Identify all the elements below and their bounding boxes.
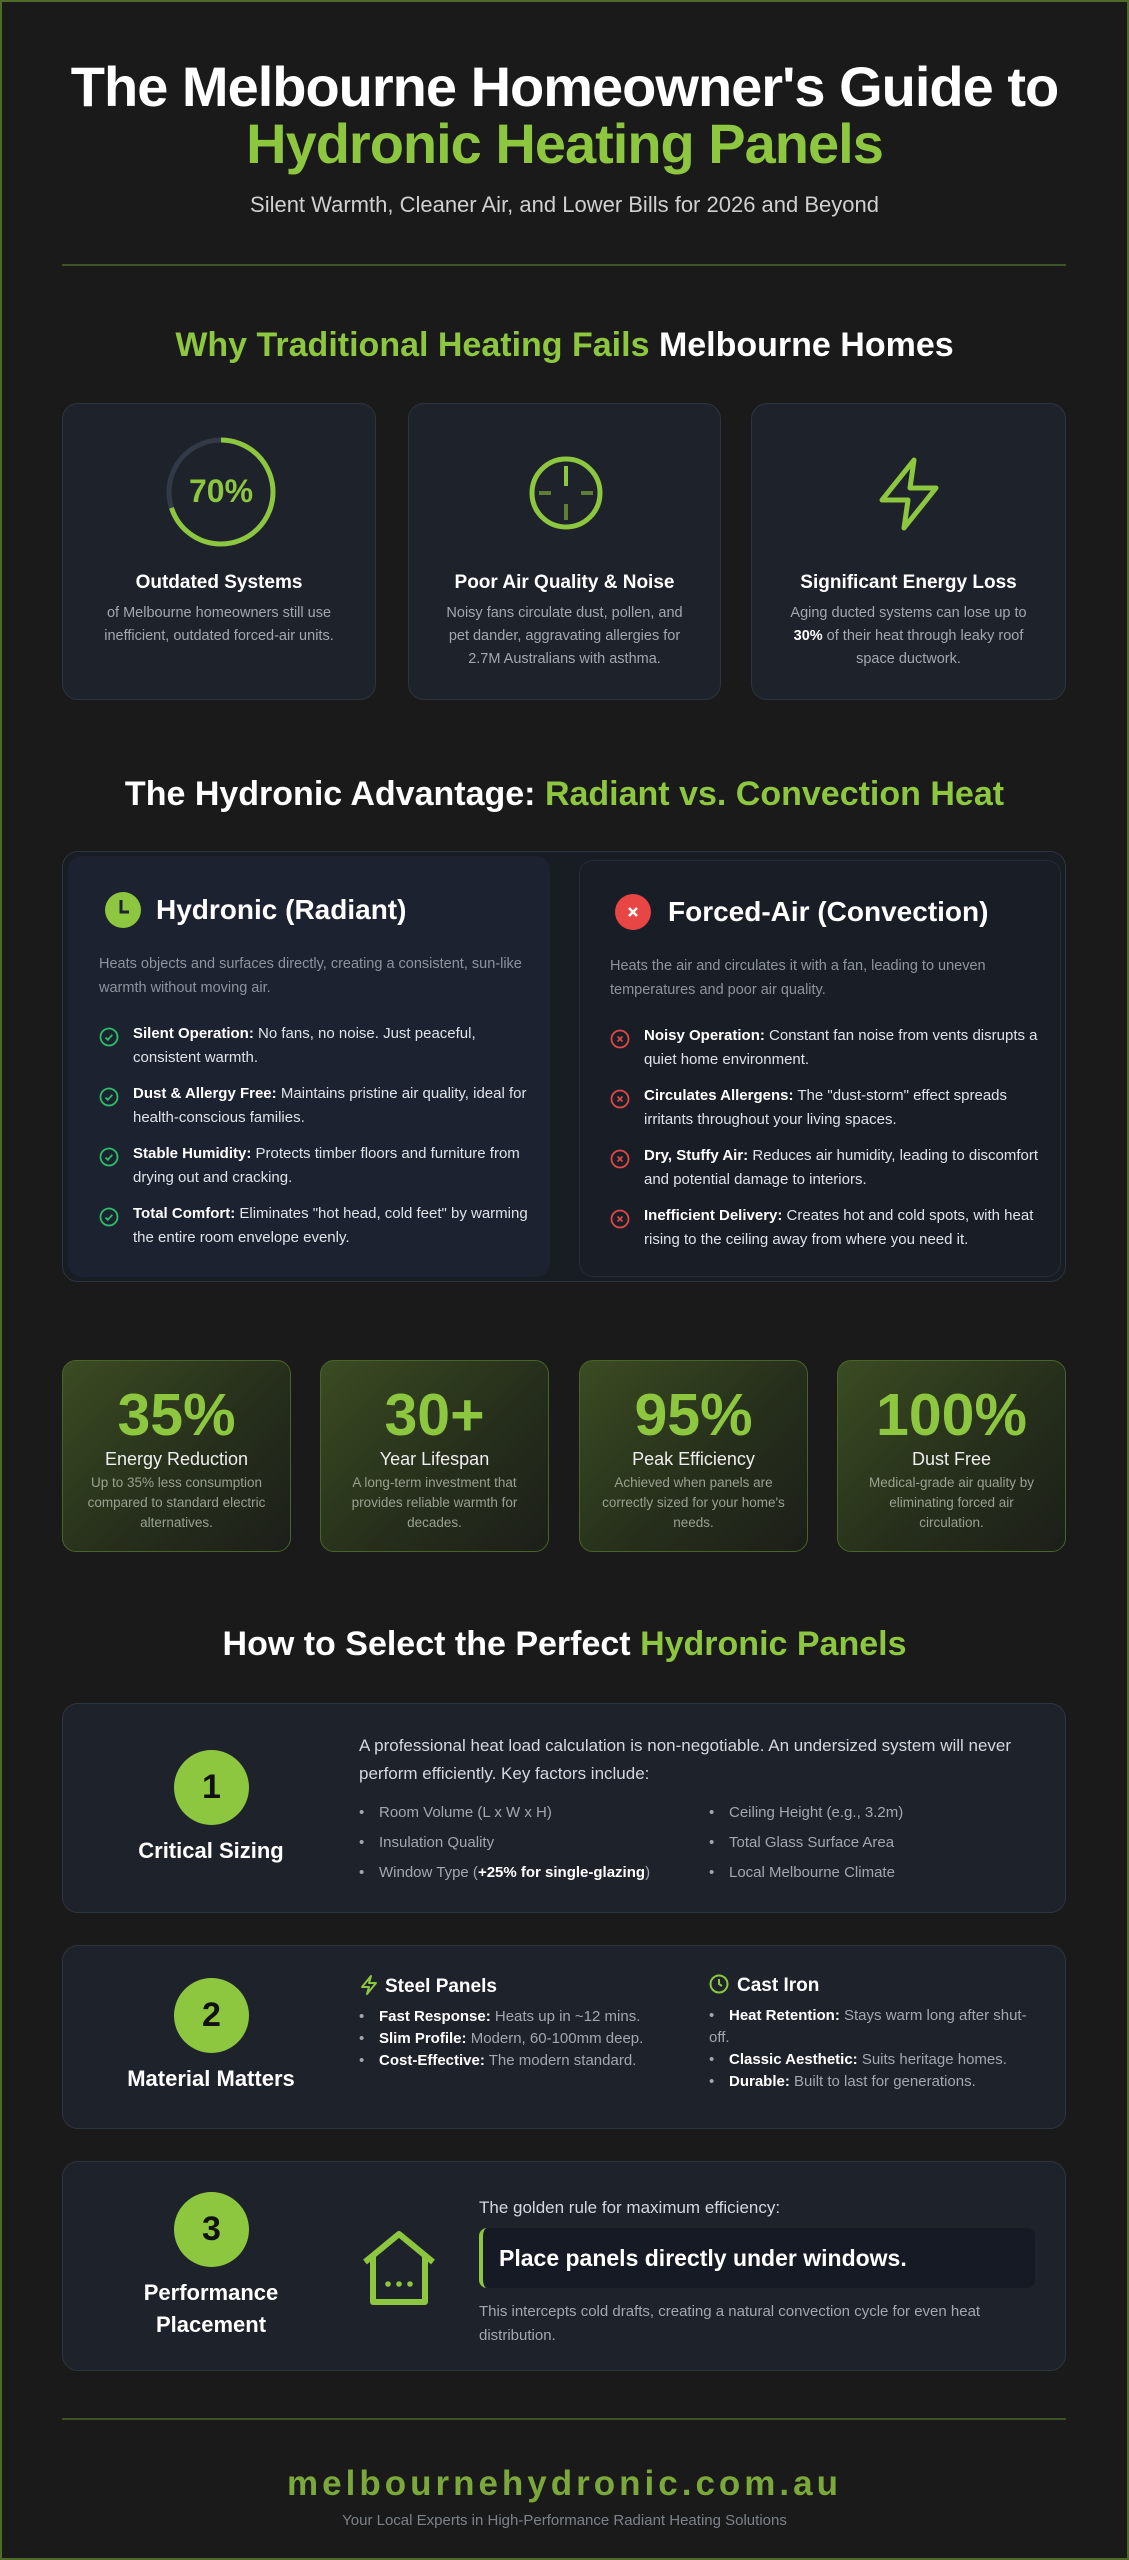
- stat: 30+: [320, 1360, 549, 1552]
- column: steel panels: •: [359, 2052, 364, 2069]
- step 1: critical sizing: [62, 1703, 1066, 1913]
- step label: Critical Sizing: [138, 1838, 284, 1863]
- number badge: 3: [202, 2210, 221, 2248]
- list: factors left: Insulation Quality: [379, 1834, 494, 1851]
- icon: 70% ring: 70%: [189, 473, 253, 509]
- card text: Noisy fans circulate dust, pollen, and pet dander, aggravating allergies for 2.7M Australians with asthma.: [446, 605, 683, 667]
- stat: 100%: [837, 1360, 1066, 1552]
- list: factors left: Room Volume (L x W x H): [379, 1804, 552, 1821]
- heading: Forced-Air (Convection): [668, 896, 988, 927]
- text: explanation: This intercepts cold drafts, creating a natural convection cycle for even heat distribution.: [479, 2303, 980, 2344]
- step 3: performance placement: [62, 2161, 1066, 2371]
- column: cast iron: •: [709, 2051, 714, 2068]
- column: cast iron: •: [709, 2073, 714, 2090]
- item: Stable Humidity: Protects timber floors and furniture from drying out and cracking.: [133, 1145, 520, 1186]
- stat: 35%: [62, 1360, 291, 1552]
- item: Inefficient Delivery: Creates hot and cold spots, with heat rising to the ceiling away from where you need it.: [644, 1207, 1033, 1248]
- stat: 100%: Medical-grade air quality by eliminating forced air circulation.: [869, 1475, 1034, 1530]
- panel: energy loss: [751, 403, 1066, 700]
- stat: 35%: Energy Reduction: [105, 1449, 248, 1469]
- panel: poor air quality: [408, 403, 721, 700]
- card title: Outdated Systems: [136, 572, 302, 593]
- column: cast iron: Classic Aesthetic: Suits heritage homes.: [729, 2051, 1007, 2068]
- column: steel panels: Fast Response: Heats up in ~12 mins.: [379, 2008, 640, 2025]
- intro text: A professional heat load calculation is non-negotiable. An undersized system will never perform efficiently. Key factors include:: [359, 1736, 1011, 1783]
- item: Dust & Allergy Free: Maintains pristine air quality, ideal for health-conscious families.: [133, 1085, 526, 1126]
- column: steel panels: [359, 1975, 643, 2069]
- number badge: [174, 2192, 249, 2267]
- panel: forced air: [579, 860, 1061, 1277]
- list: factors left: •: [359, 1834, 364, 1851]
- card title: Poor Air Quality & Noise: [455, 572, 674, 593]
- stat: 30+: 30+: [384, 1382, 485, 1448]
- column: steel panels: •: [359, 2030, 364, 2047]
- stat: 95%: [579, 1360, 808, 1552]
- step label: Material Matters: [127, 2066, 295, 2091]
- number badge: 1: [202, 1768, 221, 1806]
- stat: 95%: Peak Efficiency: [632, 1449, 755, 1469]
- item: Circulates Allergens: The "dust-storm" effect spreads irritants throughout your living spaces.: [644, 1087, 1007, 1128]
- column: steel panels: •: [359, 2008, 364, 2025]
- stat: 30+: Year Lifespan: [380, 1449, 489, 1469]
- column: cast iron: Cast Iron: [737, 1975, 819, 1996]
- step label: [144, 2280, 278, 2337]
- list: factors left: [359, 1804, 650, 1881]
- stat: 95%: Achieved when panels are correctly sized for your home's needs.: [602, 1475, 785, 1530]
- stat: 35%: Up to 35% less consumption compared to standard electric alternatives.: [88, 1475, 265, 1530]
- list: factors right: [709, 1804, 903, 1881]
- column: steel panels: Cost-Effective: The modern standard.: [379, 2052, 636, 2069]
- footer url: melbournehydronic.com.au: [287, 2464, 842, 2503]
- number badge: [174, 1750, 249, 1825]
- text: golden rule: The golden rule for maximum efficiency:: [479, 2198, 780, 2217]
- card title: Significant Energy Loss: [800, 572, 1017, 593]
- icon: green clock: [105, 892, 141, 928]
- description: Heats the air and circulates it with a fan, leading to uneven temperatures and poor air quality.: [610, 958, 986, 998]
- card text: of Melbourne homeowners still use inefficient, outdated forced-air units.: [104, 605, 334, 644]
- callout: [479, 2228, 1035, 2288]
- heading: hydronic advantage: The Hydronic Advantage: Radiant vs. Convection Heat: [125, 775, 1004, 813]
- title: The Melbourne Homeowner's Guide to: [71, 55, 1058, 118]
- icon: fan/crosshair: [530, 456, 602, 530]
- panel: outdated systems: [62, 403, 376, 700]
- column: cast iron: •: [709, 2007, 714, 2024]
- list: factors left: Window Type (+25% for single-glazing): [379, 1864, 650, 1881]
- step label: Placement: [156, 2312, 266, 2337]
- list: factors right: •: [709, 1864, 714, 1881]
- title: [71, 55, 1058, 175]
- list: factors left: •: [359, 1864, 364, 1881]
- stat: 95%: 95%: [634, 1382, 753, 1448]
- description: Heats objects and surfaces directly, creating a consistent, sun-like warmth without moving air.: [99, 956, 522, 996]
- list: factors right: Ceiling Height (e.g., 3.2m): [729, 1804, 903, 1821]
- panel: comparison: [62, 851, 1066, 1282]
- list: factors right: •: [709, 1834, 714, 1851]
- number badge: [174, 1978, 249, 2053]
- stat: 35%: 35%: [117, 1382, 236, 1448]
- item: Silent Operation: No fans, no noise. Just peaceful, consistent warmth.: [133, 1025, 476, 1066]
- card text: Aging ducted systems can lose up to 30% of their heat through leaky roof space ductwork.: [790, 605, 1027, 667]
- callout: Place panels directly under windows.: [499, 2245, 907, 2271]
- list: factors right: •: [709, 1804, 714, 1821]
- subtitle: Silent Warmth, Cleaner Air, and Lower Bills for 2026 and Beyond: [250, 192, 879, 217]
- heading: Hydronic (Radiant): [156, 894, 406, 925]
- list: benefits: [100, 1025, 528, 1246]
- stat: 100%: Dust Free: [912, 1449, 991, 1469]
- column: steel panels: Steel Panels: [385, 1976, 497, 1997]
- panel: hydronic radiant: [68, 856, 550, 1277]
- stat: 30+: A long-term investment that provides reliable warmth for decades.: [352, 1475, 517, 1530]
- icon: red x: [615, 894, 651, 930]
- item: Dry, Stuffy Air: Reduces air humidity, leading to discomfort and potential damage to interiors.: [644, 1147, 1038, 1188]
- column: cast iron: Durable: Built to last for generations.: [729, 2073, 976, 2090]
- icon: lightning: [880, 458, 938, 530]
- list: factors left: •: [359, 1804, 364, 1821]
- column: cast iron: Heat Retention: Stays warm long after shut-off.: [709, 2007, 1027, 2046]
- list: factors right: Local Melbourne Climate: [729, 1864, 895, 1881]
- heading: why traditional fails: Why Traditional Heating Fails Melbourne Homes: [175, 326, 954, 364]
- icon: house: [363, 2230, 435, 2305]
- number badge: 2: [202, 1996, 221, 2034]
- title: Hydronic Heating Panels: [246, 112, 883, 175]
- step 2: material matters: [62, 1945, 1066, 2129]
- column: steel panels: Slim Profile: Modern, 60-100mm deep.: [379, 2030, 643, 2047]
- footer tagline: Your Local Experts in High-Performance Radiant Heating Solutions: [342, 2512, 787, 2529]
- heading: how to select: How to Select the Perfect Hydronic Panels: [223, 1625, 906, 1663]
- item: Noisy Operation: Constant fan noise from vents disrupts a quiet home environment.: [644, 1027, 1038, 1068]
- column: cast iron: [709, 1974, 1027, 2090]
- list: drawbacks: [610, 1027, 1038, 1248]
- list: factors right: Total Glass Surface Area: [729, 1834, 894, 1851]
- icon: 70% ring: [166, 438, 276, 546]
- stat: 100%: 100%: [876, 1382, 1027, 1448]
- item: Total Comfort: Eliminates "hot head, cold feet" by warming the entire room envelope evenly.: [133, 1205, 528, 1246]
- step label: Performance: [144, 2280, 278, 2305]
